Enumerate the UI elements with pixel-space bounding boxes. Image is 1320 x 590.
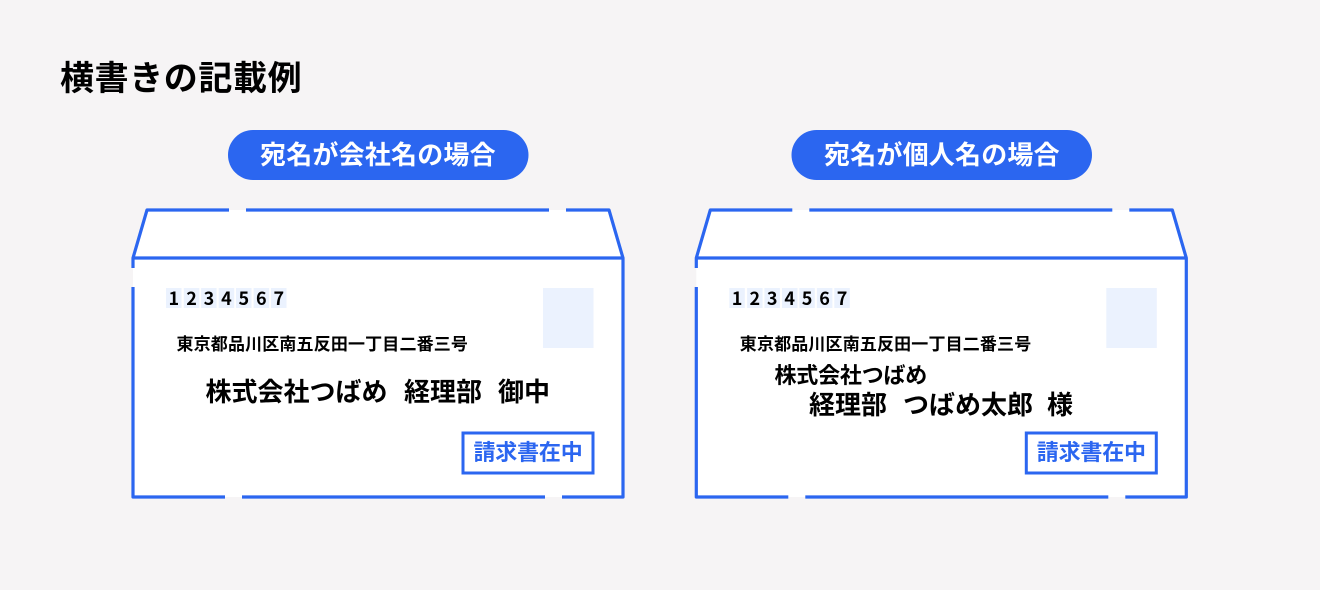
postal code boxes: 5 [238,285,249,311]
panel: individual envelope [696,210,1186,497]
company name: 株式会社つばめ [774,358,927,390]
postal code boxes: 7 [273,285,284,311]
postal code boxes: 1 [732,285,742,311]
addressee: 株式会社つばめ [206,372,388,409]
heading pill: individual addressee: 宛名が個人名の場合 [824,135,1060,172]
heading pill: company addressee: 宛名が会社名の場合 [260,135,496,172]
heading pill: individual addressee [792,130,1092,180]
stamp: enclosed invoice [1026,433,1156,473]
postal code boxes: 6 [256,285,267,311]
postal code boxes: 4 [784,285,795,311]
stamp: enclosed invoice [463,433,593,473]
addressee: つばめ太郎 [903,385,1033,422]
postal code boxes: 2 [186,285,197,311]
address: 東京都品川区南五反田一丁目二番三号 [176,330,468,355]
postal code boxes: 2 [749,285,760,311]
addressee: 御中 [498,372,550,409]
postal code boxes [729,285,850,311]
postal code boxes: 1 [168,285,179,311]
stamp area [1106,288,1157,348]
postal code boxes: 3 [767,285,778,311]
addressee: 様 [1047,385,1073,422]
postal code boxes: 6 [819,285,830,311]
postal code boxes: 5 [802,285,812,311]
heading pill: company addressee [228,130,528,180]
title: 横書きの記載例 [60,51,302,100]
address: 東京都品川区南五反田一丁目二番三号 [740,330,1031,355]
postal code boxes: 7 [837,285,847,311]
addressee: 経理部 [809,385,887,422]
stamp: enclosed invoice: 請求書在中 [474,435,583,467]
addressee: 経理部 [404,372,482,409]
stamp area [543,288,594,348]
postal code boxes [166,285,286,311]
postal code boxes: 4 [221,285,232,311]
panel: company envelope [133,210,623,497]
postal code boxes: 3 [204,285,214,311]
envelope body [696,210,1186,497]
envelope body [133,210,623,497]
stamp: enclosed invoice: 請求書在中 [1037,435,1146,467]
